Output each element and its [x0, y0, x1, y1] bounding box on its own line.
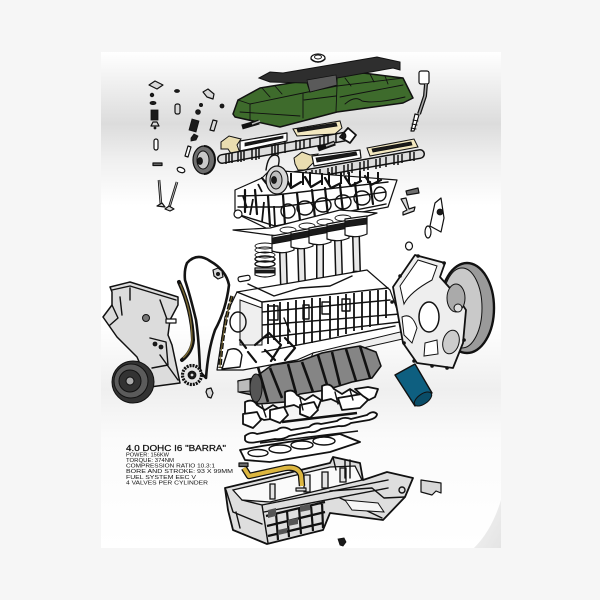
engine specification text: [126, 443, 233, 486]
bell housing dowel: [406, 242, 412, 250]
camshaft upper: [222, 128, 356, 164]
oil pan: [225, 457, 413, 544]
crank pulley: [112, 361, 154, 403]
wrist pin: [238, 275, 250, 282]
cam gear left: [193, 146, 215, 174]
head stud and bracket: [401, 188, 444, 238]
hydraulic lifter small: [242, 121, 335, 149]
left valve train parts: [149, 81, 224, 174]
ignition coil: [411, 71, 429, 131]
flat oil-pan gasket: [240, 431, 360, 462]
back plate: [392, 255, 466, 368]
main bearing caps: [243, 385, 378, 428]
cylinder head: [234, 170, 397, 230]
cam gear right: [266, 155, 288, 194]
small bolt: [206, 388, 213, 398]
crank sprocket: [182, 366, 202, 384]
piston rings: [255, 243, 275, 277]
engine specification text: 4 VALVES PER CYLINDER: [126, 480, 208, 486]
engine block: [217, 270, 407, 370]
green valve cover: [233, 73, 413, 127]
guide highlight: [180, 284, 192, 358]
tensioner bolt: [213, 268, 223, 279]
flywheel: [440, 263, 494, 353]
poster corner curl: [474, 500, 501, 548]
oil filler cap: [311, 54, 325, 62]
timing chain: [185, 257, 229, 378]
chain guide: [179, 282, 193, 360]
intake and exhaust valves: [157, 180, 177, 211]
wavy gasket: [245, 412, 377, 443]
oil filter: [395, 364, 434, 409]
thin rail: [282, 413, 357, 422]
engine specification text: POWER: 156KW: [126, 452, 169, 458]
engine specification text: TORQUE: 374NM: [126, 458, 174, 464]
drain plug: [338, 538, 346, 546]
engine specification text: BORE AND STROKE: 93 X 99MM: [126, 469, 233, 475]
poster sheet: [101, 52, 501, 548]
sump bracket: [421, 480, 441, 495]
engine specification text: 4.0 DOHC I6 "BARRA": [126, 443, 226, 453]
connecting rods and pistons: [272, 216, 367, 300]
black cover plate: [259, 57, 400, 92]
camshaft carriers: [221, 121, 418, 170]
timing cover: [103, 282, 180, 387]
engine specification text: FUEL SYSTEM EEC V: [126, 475, 197, 481]
crankshaft: [238, 346, 381, 404]
head gasket: [233, 210, 377, 238]
engine specification text: COMPRESSION RATIO 10.3:1: [126, 464, 215, 470]
oil pickup tube: [239, 463, 306, 491]
camshaft lower: [295, 152, 420, 182]
grey plate detail: [307, 75, 337, 92]
